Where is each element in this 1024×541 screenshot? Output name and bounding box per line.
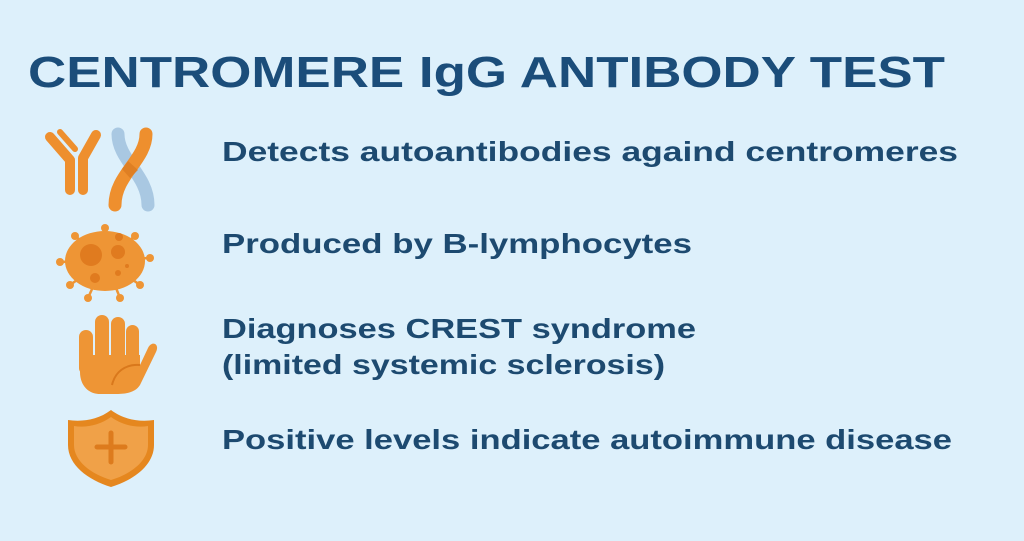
icon: antibody and chromosome — [50, 132, 148, 205]
text: produced: Produced by B-lymphocytes — [222, 228, 692, 259]
text: detects: Detects autoantibodies againd centromeres — [222, 136, 958, 167]
title: CENTROMERE IgG ANTIBODY TEST — [28, 48, 945, 97]
icon: shield — [68, 410, 154, 487]
text: positive: Positive levels indicate autoimmune disease — [222, 424, 952, 455]
icon: hand — [79, 315, 157, 394]
text: diagnoses — [222, 313, 696, 380]
text: diagnoses: Diagnoses CREST syndrome — [222, 313, 696, 344]
icon: B-lymphocyte — [56, 224, 154, 302]
text: diagnoses: (limited systemic sclerosis) — [222, 349, 665, 380]
